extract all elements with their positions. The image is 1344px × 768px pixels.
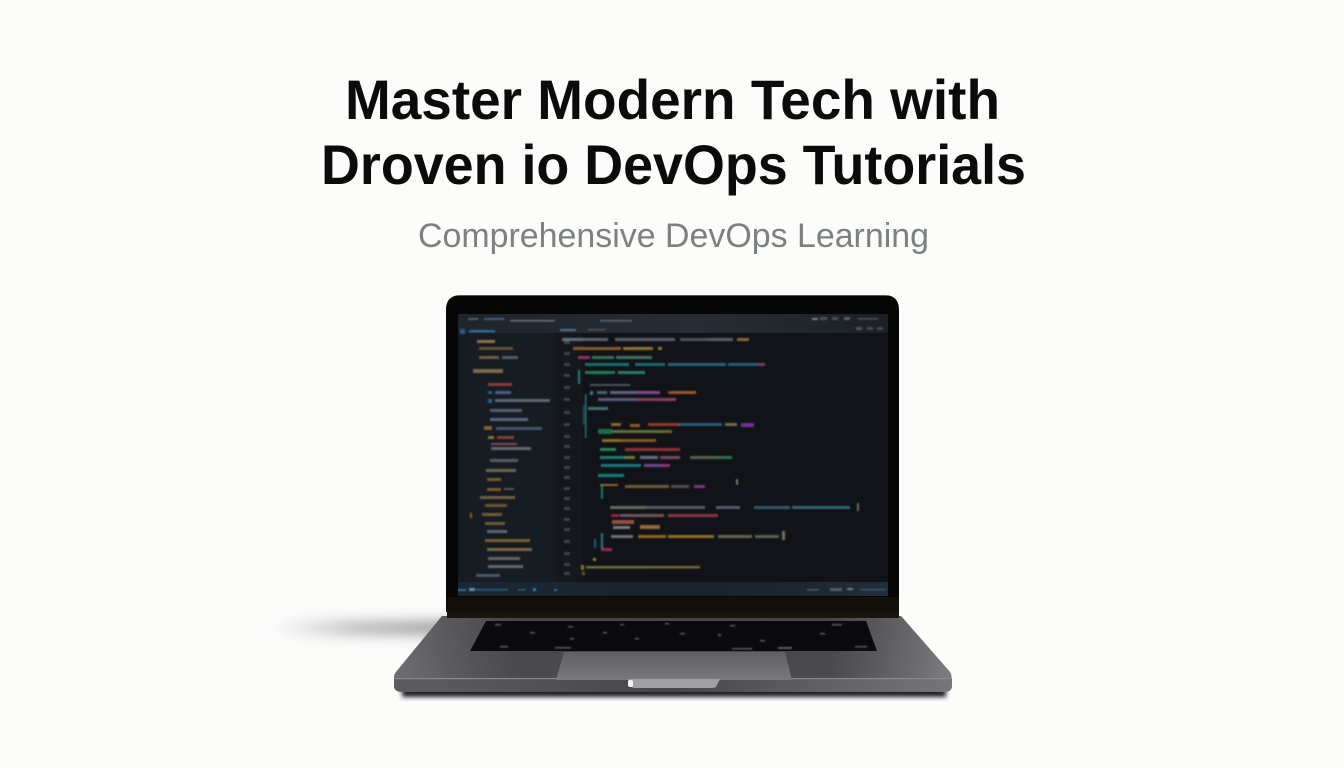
hinge xyxy=(447,612,899,618)
laptop lid bezel xyxy=(446,295,899,612)
laptop base deck xyxy=(394,616,952,692)
title: Master Modern Tech with xyxy=(345,68,1000,131)
status bar items xyxy=(458,588,886,591)
laptop ground shadow xyxy=(402,688,946,697)
code lines xyxy=(562,338,859,575)
sidebar file tree xyxy=(460,329,550,577)
menu bar items xyxy=(468,317,883,331)
laptop xyxy=(394,295,952,697)
gutter line numbers xyxy=(564,340,570,575)
line number gutter xyxy=(556,333,583,582)
subtitle: Comprehensive DevOps Learning xyxy=(418,217,929,255)
file explorer sidebar xyxy=(458,333,556,582)
title: Droven io DevOps Tutorials xyxy=(321,133,1026,196)
keyboard xyxy=(470,621,877,651)
laptop screen xyxy=(458,314,888,596)
trackpad xyxy=(556,652,792,680)
code editor background xyxy=(458,314,888,596)
title xyxy=(321,68,1026,196)
cast shadow left of laptop xyxy=(270,622,455,634)
top menu bar xyxy=(458,314,888,333)
front notch xyxy=(628,679,720,688)
status bar xyxy=(458,582,888,596)
